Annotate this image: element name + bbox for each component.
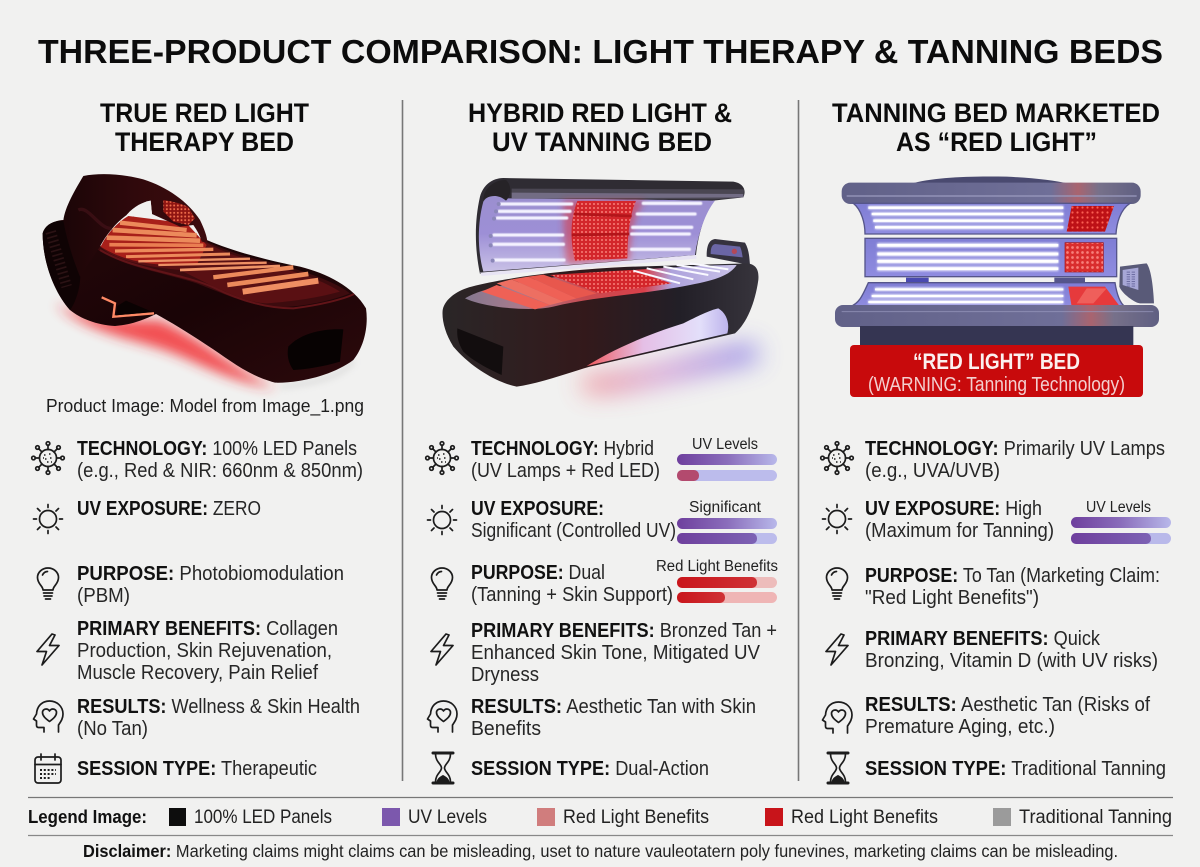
text: session type: SESSION TYPE: Dual-Action — [471, 758, 709, 780]
legend: 100% LED Panels — [194, 807, 332, 828]
heading: true red light — [100, 98, 309, 157]
heading: tanning bed marketed: AS “RED LIGHT” — [896, 127, 1097, 157]
disclaimer: Disclaimer: Marketing claims might claims can be misleading, uset to nature vauleotatern poly funevines, marketing claims can be misleading. — [83, 841, 1118, 861]
text: primary benefits: Production, Skin Rejuvenation, — [77, 640, 332, 662]
callout: red light bed warning — [850, 345, 1143, 397]
chart: significant bars: Significant — [689, 499, 762, 516]
text: uv exposure: UV EXPOSURE: — [471, 498, 604, 520]
heading: true red light: TRUE RED LIGHT — [100, 98, 309, 128]
icon: hourglass — [828, 753, 848, 783]
icon: sun — [34, 504, 62, 534]
title: THREE-PRODUCT COMPARISON: LIGHT THERAPY & TANNING BEDS — [38, 33, 1163, 70]
icon: head with heart — [428, 701, 457, 732]
text: uv exposure: Significant (Controlled UV) — [471, 520, 676, 542]
text: uv exposure: UV EXPOSURE: High — [865, 498, 1042, 520]
icon: light bulb — [38, 568, 58, 599]
heading: hybrid: HYBRID RED LIGHT & — [468, 98, 732, 128]
icon: head with heart — [822, 702, 852, 733]
text: purpose: PURPOSE: Photobiomodulation — [77, 563, 344, 585]
legend: Legend Image: — [28, 807, 147, 827]
row: purpose — [826, 565, 1160, 609]
text: technology: TECHNOLOGY: Primarily UV Lamps — [865, 438, 1165, 460]
icon: hourglass — [433, 753, 453, 783]
icon: light bulb — [432, 568, 452, 599]
icon: sun — [822, 504, 852, 534]
text: technology: (UV Lamps + Red LED) — [471, 460, 660, 482]
text: purpose: (PBM) — [77, 585, 130, 607]
text: technology: TECHNOLOGY: 100% LED Panels — [77, 438, 357, 460]
text: technology: (e.g., Red & NIR: 660nm & 850nm) — [77, 460, 363, 482]
text: primary benefits: PRIMARY BENEFITS: Collagen — [77, 618, 338, 640]
icon: lightning bolt — [37, 634, 59, 665]
row: technology — [426, 436, 777, 482]
text: technology — [77, 438, 363, 482]
icon: head with heart — [34, 701, 63, 732]
callout: red light bed warning: “RED LIGHT” BED — [913, 349, 1080, 374]
text: session type: SESSION TYPE: Traditional Tanning — [865, 758, 1166, 780]
text: purpose: "Red Light Benefits") — [865, 587, 1039, 609]
heading: hybrid — [468, 98, 732, 157]
text: primary benefits — [471, 620, 777, 686]
text: results: RESULTS: Wellness & Skin Health — [77, 696, 360, 718]
icon: lightning bolt — [826, 634, 848, 665]
text: primary benefits: Dryness — [471, 664, 539, 686]
icon: calendar — [35, 754, 61, 783]
illustration: red light therapy bed — [43, 174, 367, 388]
text: purpose — [77, 563, 344, 607]
row: results — [34, 696, 360, 740]
text: technology: (e.g., UVA/UVB) — [865, 460, 1000, 482]
chart: significant bars — [677, 499, 777, 544]
legend: Traditional Tanning — [1019, 807, 1172, 828]
icon: virus node — [426, 442, 458, 474]
chart: red light benefits bars: Red Light Benefits — [656, 558, 778, 575]
text: results: Benefits — [471, 718, 541, 740]
text: technology — [471, 438, 660, 482]
text: results: RESULTS: Aesthetic Tan (Risks of — [865, 694, 1150, 716]
text: technology: TECHNOLOGY: Hybrid — [471, 438, 654, 460]
panel: true red light therapy bed — [32, 98, 367, 783]
text: purpose: PURPOSE: Dual — [471, 562, 605, 584]
text: session type: SESSION TYPE: Therapeutic — [77, 758, 317, 780]
chart: uv levels bars: UV Levels — [1086, 499, 1151, 516]
row: uv exposure — [822, 498, 1171, 544]
legend: UV Levels — [408, 807, 487, 828]
text: purpose — [471, 562, 673, 606]
text: primary benefits: PRIMARY BENEFITS: Bronzed Tan + — [471, 620, 777, 642]
row: session type — [35, 754, 317, 783]
chart: uv levels bars: UV Levels — [692, 436, 758, 453]
heading: true red light: THERAPY BED — [115, 127, 294, 157]
chart: uv levels bars — [677, 436, 777, 481]
row: uv exposure — [34, 498, 261, 534]
icon: light bulb — [826, 568, 848, 599]
panel: hybrid red light and uv tanning bed — [426, 98, 778, 783]
row: primary benefits — [826, 628, 1158, 672]
row: results — [822, 694, 1150, 738]
chart: red light benefits bars — [656, 558, 778, 603]
text: uv exposure — [865, 498, 1054, 542]
row: session type — [828, 753, 1166, 783]
row: primary benefits — [431, 620, 777, 686]
text: purpose: PURPOSE: To Tan (Marketing Claim: — [865, 565, 1160, 587]
text: uv exposure — [471, 498, 676, 542]
text: primary benefits — [865, 628, 1158, 672]
callout: red light bed warning: (WARNING: Tanning Technology) — [868, 374, 1125, 396]
text: primary benefits: Bronzing, Vitamin D (with UV risks) — [865, 650, 1158, 672]
text: results — [865, 694, 1150, 738]
chart: uv levels bars — [1071, 499, 1171, 544]
panel: tanning bed marketed as red light — [821, 98, 1171, 783]
legend — [28, 807, 1172, 828]
text: primary benefits: Enhanced Skin Tone, Mitigated UV — [471, 642, 761, 664]
text: results — [471, 696, 756, 740]
text: results: Premature Aging, etc.) — [865, 716, 1055, 738]
heading: tanning bed marketed: TANNING BED MARKETED — [832, 98, 1160, 128]
row: uv exposure — [428, 498, 777, 544]
heading: tanning bed marketed — [832, 98, 1160, 157]
text: technology — [865, 438, 1165, 482]
icon: lightning bolt — [431, 634, 453, 665]
illustration: hybrid bed — [442, 178, 760, 392]
row: technology — [821, 438, 1165, 482]
text: results: RESULTS: Aesthetic Tan with Skin — [471, 696, 756, 718]
text: purpose — [865, 565, 1160, 609]
legend: Red Light Benefits — [563, 807, 709, 828]
legend: Red Light Benefits — [791, 807, 938, 828]
row: primary benefits — [37, 618, 338, 684]
text: results — [77, 696, 360, 740]
text: results: (No Tan) — [77, 718, 148, 740]
caption: product image: Product Image: Model from Image_1.png — [46, 396, 364, 417]
illustration: tanning bed — [835, 177, 1159, 348]
row: results — [428, 696, 756, 740]
text: uv exposure: UV EXPOSURE: ZERO — [77, 498, 261, 520]
row: technology — [32, 438, 363, 482]
text: primary benefits: Muscle Recovery, Pain Relief — [77, 662, 318, 684]
icon: virus node — [32, 442, 64, 474]
row: session type — [433, 753, 709, 783]
row: purpose — [432, 558, 778, 606]
text: primary benefits: PRIMARY BENEFITS: Quick — [865, 628, 1101, 650]
icon: virus node — [821, 442, 853, 474]
heading: hybrid: UV TANNING BED — [492, 127, 712, 157]
text: uv exposure: (Maximum for Tanning) — [865, 520, 1054, 542]
icon: sun — [428, 506, 456, 534]
row: purpose — [38, 563, 344, 607]
text: purpose: (Tanning + Skin Support) — [471, 584, 673, 606]
text: primary benefits — [77, 618, 338, 684]
